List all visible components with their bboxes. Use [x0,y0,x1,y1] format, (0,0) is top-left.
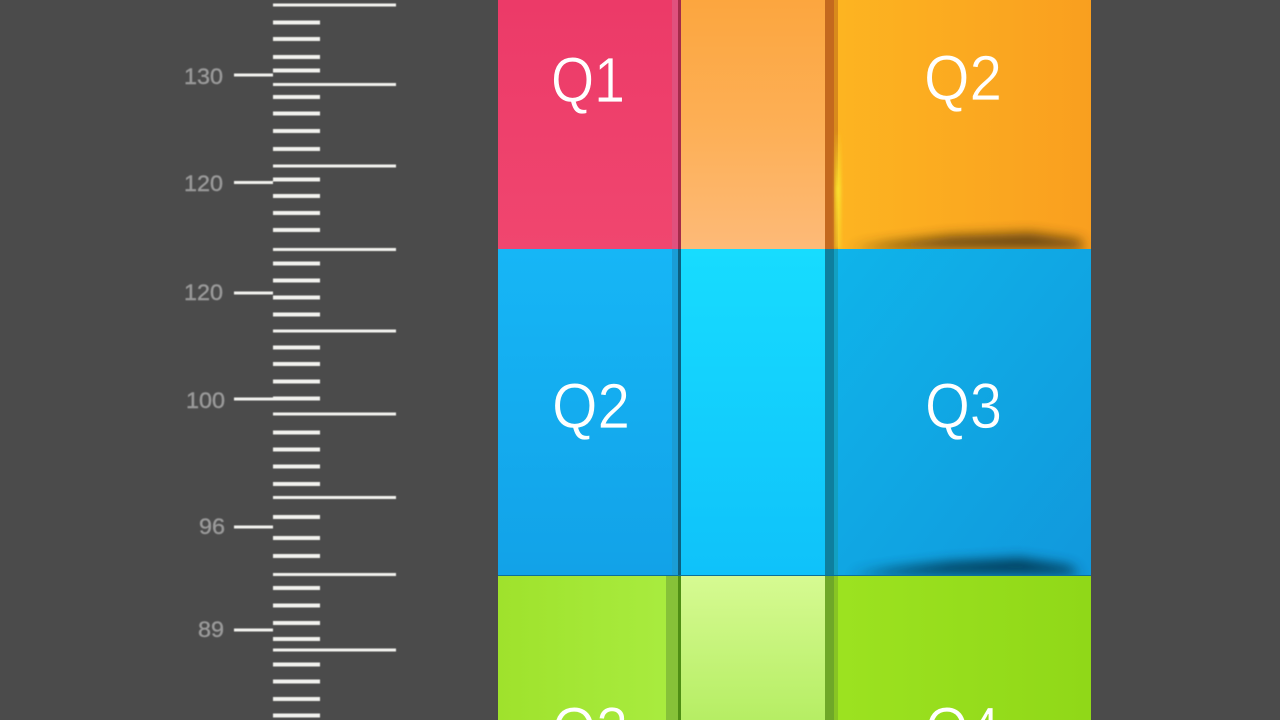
short ruler ticks [273,20,320,718]
scale labels: 130 [184,64,223,89]
label: Q2: Q2 [552,370,630,442]
panel: bottom row (green) [498,576,1091,720]
long ruler ticks [273,4,396,652]
scale labels: 120 [184,280,223,305]
label: Q3: Q3 [925,370,1002,442]
scale labels [184,64,225,642]
scale labels: 120 [184,171,223,196]
scale labels: 96 [199,514,225,539]
panel: top row (orange and pink) [498,0,1091,249]
scale labels: 89 [198,617,224,642]
ruler scale [234,4,396,718]
major ticks [234,74,273,632]
label: Q1: Q1 [551,44,625,116]
label: Q2: Q2 [924,42,1002,114]
scale labels: 100 [186,388,225,413]
panel: middle row (blue) [498,249,1091,576]
